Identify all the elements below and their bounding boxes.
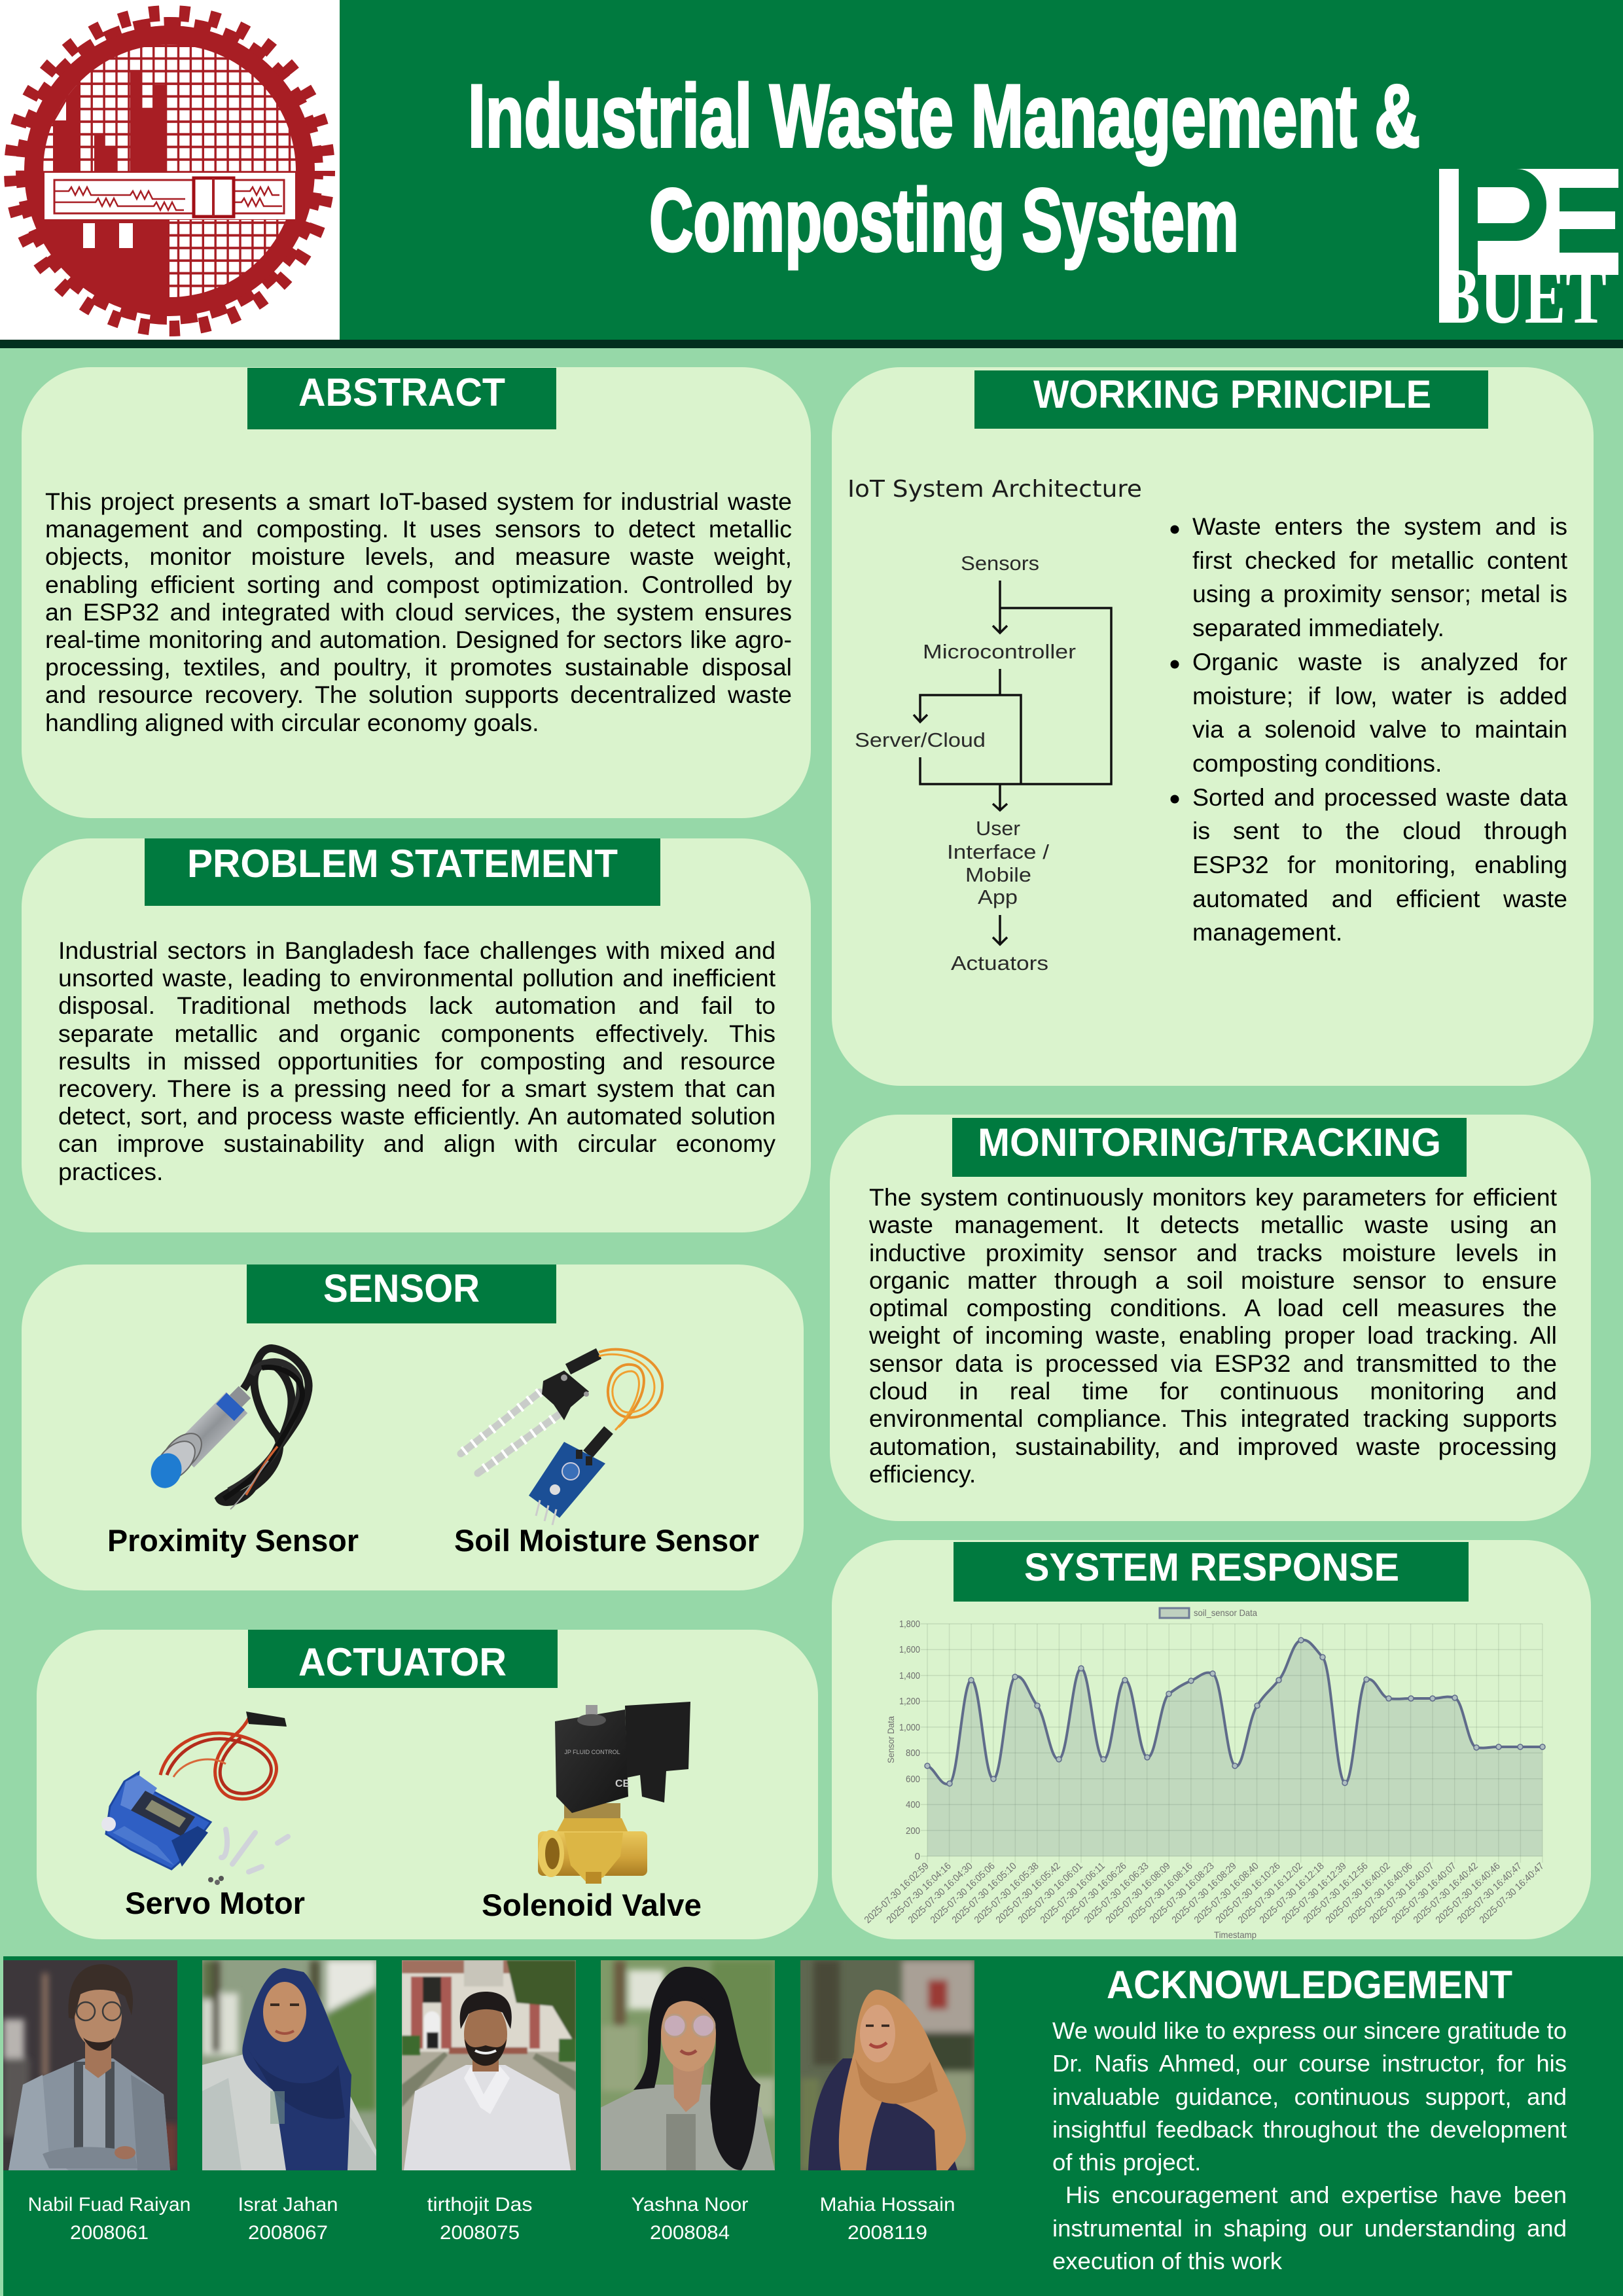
text: abstract body: real-time monitoring and automation. Designed for sectors like agro- — [45, 626, 792, 653]
chart: IoT system architecture diagram — [847, 476, 1142, 975]
chart: soil sensor line chart: 2025-07-30 16:08:09 — [1104, 1860, 1173, 1926]
text: working principle bullets: separated immediately. — [1192, 614, 1444, 641]
chart: soil sensor line chart: 2025-07-30 16:40:07 — [1368, 1860, 1436, 1926]
chart: soil sensor line chart: 2025-07-30 16:12:18 — [1258, 1860, 1327, 1926]
panel: team and acknowledgement footer — [3, 1956, 1623, 2296]
chart: soil sensor line chart: 2025-07-30 16:40:06 — [1346, 1860, 1415, 1926]
caption: soil moisture sensor: Soil Moisture Sensor — [454, 1523, 759, 1558]
text: working principle bullets: moisture; if low, water is added — [1192, 682, 1567, 709]
chart: soil sensor line chart: 2025-07-30 16:05:06 — [929, 1860, 997, 1926]
text: acknowledgement body: We would like to express our sincere gratitude to — [1052, 2017, 1567, 2044]
caption: team names and IDs: 2008084 — [650, 2222, 730, 2244]
icon: soil moisture sensor — [461, 1350, 662, 1525]
heading: acknowledgement: ACKNOWLEDGEMENT — [1107, 1963, 1512, 2007]
chart: IoT system architecture diagram: IoT System Architecture — [847, 476, 1142, 503]
heading: abstract: ABSTRACT — [298, 370, 505, 414]
chart: soil sensor line chart: 2025-07-30 16:08:29 — [1170, 1860, 1239, 1926]
heading: problem statement: PROBLEM STATEMENT — [187, 842, 618, 886]
text: abstract body: handling aligned with circular economy goals. — [45, 709, 539, 736]
heading: working principle: WORKING PRINCIPLE — [1033, 372, 1431, 416]
chart: soil sensor line chart: 2025-07-30 16:40:47 — [1455, 1860, 1524, 1926]
text: acknowledgement body: instrumental in shaping our understanding and — [1052, 2215, 1567, 2242]
photo: tirthojit Das — [402, 1960, 576, 2170]
chart: soil sensor line chart: 2025-07-30 16:06:01 — [1016, 1860, 1085, 1926]
text: acknowledgement body: insightful feedback throughout the development — [1052, 2116, 1567, 2143]
panel: problem statement — [22, 838, 811, 1232]
caption: team names and IDs: tirthojit Das — [427, 2194, 533, 2215]
chart: soil sensor line chart: 2025-07-30 16:04:30 — [906, 1860, 975, 1926]
text: problem statement body: disposal. Traditional methods lack automation and fail to — [58, 992, 776, 1019]
text: working principle bullets: Organic waste is analyzed for — [1192, 648, 1567, 675]
photo: Israt Jahan — [202, 1960, 376, 2170]
chart: soil sensor line chart: 2025-07-30 16:02:59 — [863, 1860, 931, 1926]
text: working principle bullets — [1170, 510, 1567, 955]
chart: soil sensor line chart: 2025-07-30 16:08:23 — [1148, 1860, 1217, 1926]
chart: soil sensor line chart: 0 — [915, 1851, 920, 1862]
logo: BUET gear emblem — [0, 0, 340, 340]
heading: system response: SYSTEM RESPONSE — [1024, 1545, 1399, 1589]
chart: soil sensor line chart: 2025-07-30 16:40:47 — [1478, 1860, 1546, 1926]
text: monitoring body: waste management. It detects metallic waste using an — [869, 1211, 1557, 1238]
caption: solenoid valve: Solenoid Valve — [482, 1888, 702, 1922]
caption: team names and IDs: 2008119 — [847, 2222, 927, 2244]
text: working principle bullets: is sent to the cloud through — [1192, 817, 1567, 844]
text: working principle bullets: management. — [1192, 918, 1342, 946]
chart: soil sensor line chart: 2025-07-30 16:04:16 — [885, 1860, 954, 1926]
chart: soil sensor line chart — [863, 1607, 1546, 1940]
chart: soil sensor line chart: 2025-07-30 16:40:46 — [1434, 1860, 1503, 1926]
text: abstract body: and resource recovery. The solution supports decentralized waste — [45, 681, 792, 708]
chart: soil sensor line chart: 1,400 — [899, 1670, 920, 1681]
text: working principle bullets: using a proximity sensor; metal is — [1192, 580, 1567, 607]
chart: IoT system architecture diagram: User — [976, 817, 1020, 840]
chart: soil sensor line chart: 2025-07-30 16:05:42 — [994, 1860, 1063, 1926]
text: abstract body: management and composting. It uses sensors to detect metallic — [45, 515, 792, 543]
chart: soil sensor line chart: 2025-07-30 16:12:39 — [1280, 1860, 1349, 1926]
text: working principle bullets: Waste enters the system and is — [1192, 512, 1567, 540]
heading: monitoring/tracking — [952, 1118, 1467, 1177]
chart: soil sensor line chart: 2025-07-30 16:40:42 — [1412, 1860, 1480, 1926]
chart: soil sensor line chart: Sensor Data — [885, 1716, 896, 1763]
chart: IoT system architecture diagram: Sensors — [961, 552, 1039, 575]
icon: proximity sensor — [146, 1348, 309, 1509]
heading: monitoring/tracking: MONITORING/TRACKING — [978, 1121, 1441, 1164]
chart: soil sensor line chart: 1,600 — [899, 1644, 920, 1655]
text: acknowledgement body — [1052, 2015, 1567, 2283]
text: monitoring body: weight of incoming waste, enabling proper load tracking. All — [869, 1321, 1557, 1349]
chart: soil sensor line chart: 400 — [906, 1799, 920, 1810]
caption: servo motor: Servo Motor — [125, 1886, 305, 1920]
chart: soil sensor line chart: 2025-07-30 16:12:56 — [1302, 1860, 1370, 1926]
chart: soil sensor line chart: 2025-07-30 16:08:40 — [1192, 1860, 1261, 1926]
caption: team names and IDs — [27, 2194, 955, 2244]
chart: soil sensor line chart: 2025-07-30 16:40:07 — [1390, 1860, 1459, 1926]
chart: soil sensor line chart: 2025-07-30 16:12:02 — [1236, 1860, 1305, 1926]
chart: soil sensor line chart: 2025-07-30 16:05:38 — [972, 1860, 1041, 1926]
text: monitoring body: inductive proximity sensor and tracks moisture levels in — [869, 1239, 1557, 1266]
icon: servo motor — [101, 1712, 288, 1885]
heading: abstract — [247, 368, 556, 429]
photo: Nabil Fuad Raiyan — [3, 1960, 177, 2170]
panel: system response — [832, 1540, 1591, 1940]
chart: soil sensor line chart: 600 — [906, 1774, 920, 1785]
icon: solenoid valve — [538, 1702, 690, 1884]
caption: team names and IDs: Israt Jahan — [238, 2194, 338, 2215]
chart: soil sensor line chart: 200 — [906, 1825, 920, 1837]
text: abstract body — [45, 488, 792, 743]
icon: solenoid valve: CE — [615, 1778, 630, 1789]
text: abstract body: This project presents a smart IoT-based system for industrial waste — [45, 488, 792, 515]
heading: working principle — [974, 370, 1488, 429]
heading: sensor: SENSOR — [323, 1266, 480, 1310]
chart: soil sensor line chart: 2025-07-30 16:06:11 — [1039, 1860, 1107, 1926]
heading: actuator: ACTUATOR — [298, 1640, 507, 1684]
text: working principle bullets: via a solenoid valve to maintain — [1192, 715, 1567, 743]
chart: soil sensor line chart: 2025-07-30 16:06:33 — [1082, 1860, 1151, 1926]
text: monitoring body: sensor data is processed via ESP32 and transmitted to the — [869, 1350, 1557, 1377]
title: Composting System — [649, 170, 1239, 270]
text: problem statement body: unsorted waste, leading to environmental pollution and inefficient — [58, 964, 776, 992]
caption: proximity sensor: Proximity Sensor — [107, 1523, 359, 1558]
panel: sensor — [22, 1265, 804, 1590]
heading: sensor — [247, 1265, 556, 1323]
caption: team names and IDs: 2008075 — [440, 2222, 520, 2244]
logo: IPE BUET — [1439, 169, 1618, 340]
panel: abstract — [22, 367, 811, 818]
panel: actuator — [37, 1630, 818, 1939]
heading: problem statement — [145, 838, 660, 906]
photo: Yashna Noor — [601, 1960, 775, 2170]
chart: soil sensor line chart: 1,200 — [899, 1696, 920, 1707]
caption: team names and IDs: 2008061 — [70, 2222, 149, 2244]
chart: soil sensor line chart: 2025-07-30 16:08:16 — [1126, 1860, 1195, 1926]
chart: soil sensor line chart: Timestamp — [1214, 1929, 1257, 1940]
icon: solenoid valve: JP FLUID CONTROL — [564, 1749, 620, 1755]
caption: team names and IDs: Nabil Fuad Raiyan — [27, 2194, 191, 2215]
chart: soil sensor line chart: soil_sensor Data — [1194, 1607, 1257, 1618]
text: acknowledgement body: execution of this work — [1052, 2248, 1282, 2274]
text: acknowledgement body: His encouragement and expertise have been — [1065, 2181, 1567, 2208]
text: monitoring body: efficiency. — [869, 1460, 976, 1488]
chart: IoT system architecture diagram: Server/Cloud — [855, 728, 986, 751]
chart: soil sensor line chart: 2025-07-30 16:10:26 — [1214, 1860, 1283, 1926]
text: problem statement body: recovery. There is a pressing need for a smart system that can — [58, 1075, 776, 1102]
chart: IoT system architecture diagram: Actuators — [951, 952, 1048, 975]
caption: team names and IDs: Yashna Noor — [631, 2194, 749, 2215]
text: acknowledgement body: Dr. Nafis Ahmed, our course instructor, for his — [1052, 2050, 1567, 2077]
text: monitoring body: optimal composting conditions. A load cell measures the — [869, 1294, 1557, 1321]
chart: soil sensor line chart: 1,000 — [899, 1722, 920, 1733]
text: acknowledgement body: of this project. — [1052, 2149, 1201, 2176]
chart: soil sensor line chart: 800 — [906, 1748, 920, 1759]
heading: system response — [954, 1542, 1469, 1602]
text: problem statement body: detect, sort, and process waste efficiently. An automated solution — [58, 1102, 776, 1130]
text: working principle bullets: Sorted and processed waste data — [1192, 783, 1567, 811]
text: problem statement body: can improve sustainability and align with circular economy — [58, 1130, 776, 1157]
chart: IoT system architecture diagram: Interface / — [947, 840, 1049, 863]
photo: Mahia Hossain — [800, 1960, 974, 2170]
text: abstract body: processing, textiles, and poultry, it promotes sustainable disposal — [45, 653, 792, 681]
text: acknowledgement body: invaluable guidance, continuous support, and — [1052, 2083, 1567, 2110]
text: abstract body: an ESP32 and integrated with cloud services, the system ensures — [45, 598, 792, 626]
text: working principle bullets: composting conditions. — [1192, 749, 1442, 777]
text: working principle bullets: automated and efficient waste — [1192, 885, 1567, 912]
text: abstract body: enabling efficient sorting and compost optimization. Controlled by — [45, 571, 792, 598]
caption: team names and IDs: 2008067 — [248, 2222, 328, 2244]
text: monitoring body — [869, 1183, 1557, 1491]
text: problem statement body — [58, 937, 776, 1192]
header banner — [0, 0, 1623, 348]
text: problem statement body: results in missed opportunities for composting and resource — [58, 1047, 776, 1075]
chart: soil sensor line chart: 1,800 — [899, 1619, 920, 1630]
chart: IoT system architecture diagram: Mobile — [965, 863, 1031, 886]
panel: monitoring/tracking — [830, 1115, 1591, 1521]
chart: soil sensor line chart: 2025-07-30 16:06:26 — [1060, 1860, 1129, 1926]
chart: soil sensor line chart: 2025-07-30 16:40:02 — [1324, 1860, 1393, 1926]
text: working principle bullets: first checked for metallic content — [1192, 547, 1567, 574]
panel: working principle — [832, 367, 1594, 1086]
caption: team names and IDs: Mahia Hossain — [819, 2194, 955, 2215]
text: monitoring body: cloud in real time for continuous monitoring and — [869, 1377, 1557, 1405]
text: monitoring body: The system continuously monitors key parameters for efficient — [869, 1183, 1557, 1211]
text: abstract body: objects, monitor moisture levels, and measure waste weight, — [45, 543, 792, 570]
text: monitoring body: organic matter through a soil moisture sensor to ensure — [869, 1266, 1557, 1294]
text: problem statement body: practices. — [58, 1158, 163, 1185]
text: problem statement body: separate metallic and organic components effectively. This — [58, 1020, 776, 1047]
chart: IoT system architecture diagram: Microcontroller — [923, 640, 1076, 663]
text: monitoring body: automation, sustainability, and improved waste processing — [869, 1433, 1557, 1460]
chart: IoT system architecture diagram: App — [978, 886, 1018, 908]
text: working principle bullets: ESP32 for monitoring, enabling — [1192, 851, 1567, 878]
text: problem statement body: Industrial sectors in Bangladesh face challenges with mixed and — [58, 937, 776, 964]
text: monitoring body: environmental compliance. This integrated tracking supports — [869, 1405, 1557, 1432]
title — [468, 66, 1420, 270]
heading: actuator — [248, 1630, 558, 1688]
chart: soil sensor line chart: 2025-07-30 16:05:10 — [950, 1860, 1019, 1926]
